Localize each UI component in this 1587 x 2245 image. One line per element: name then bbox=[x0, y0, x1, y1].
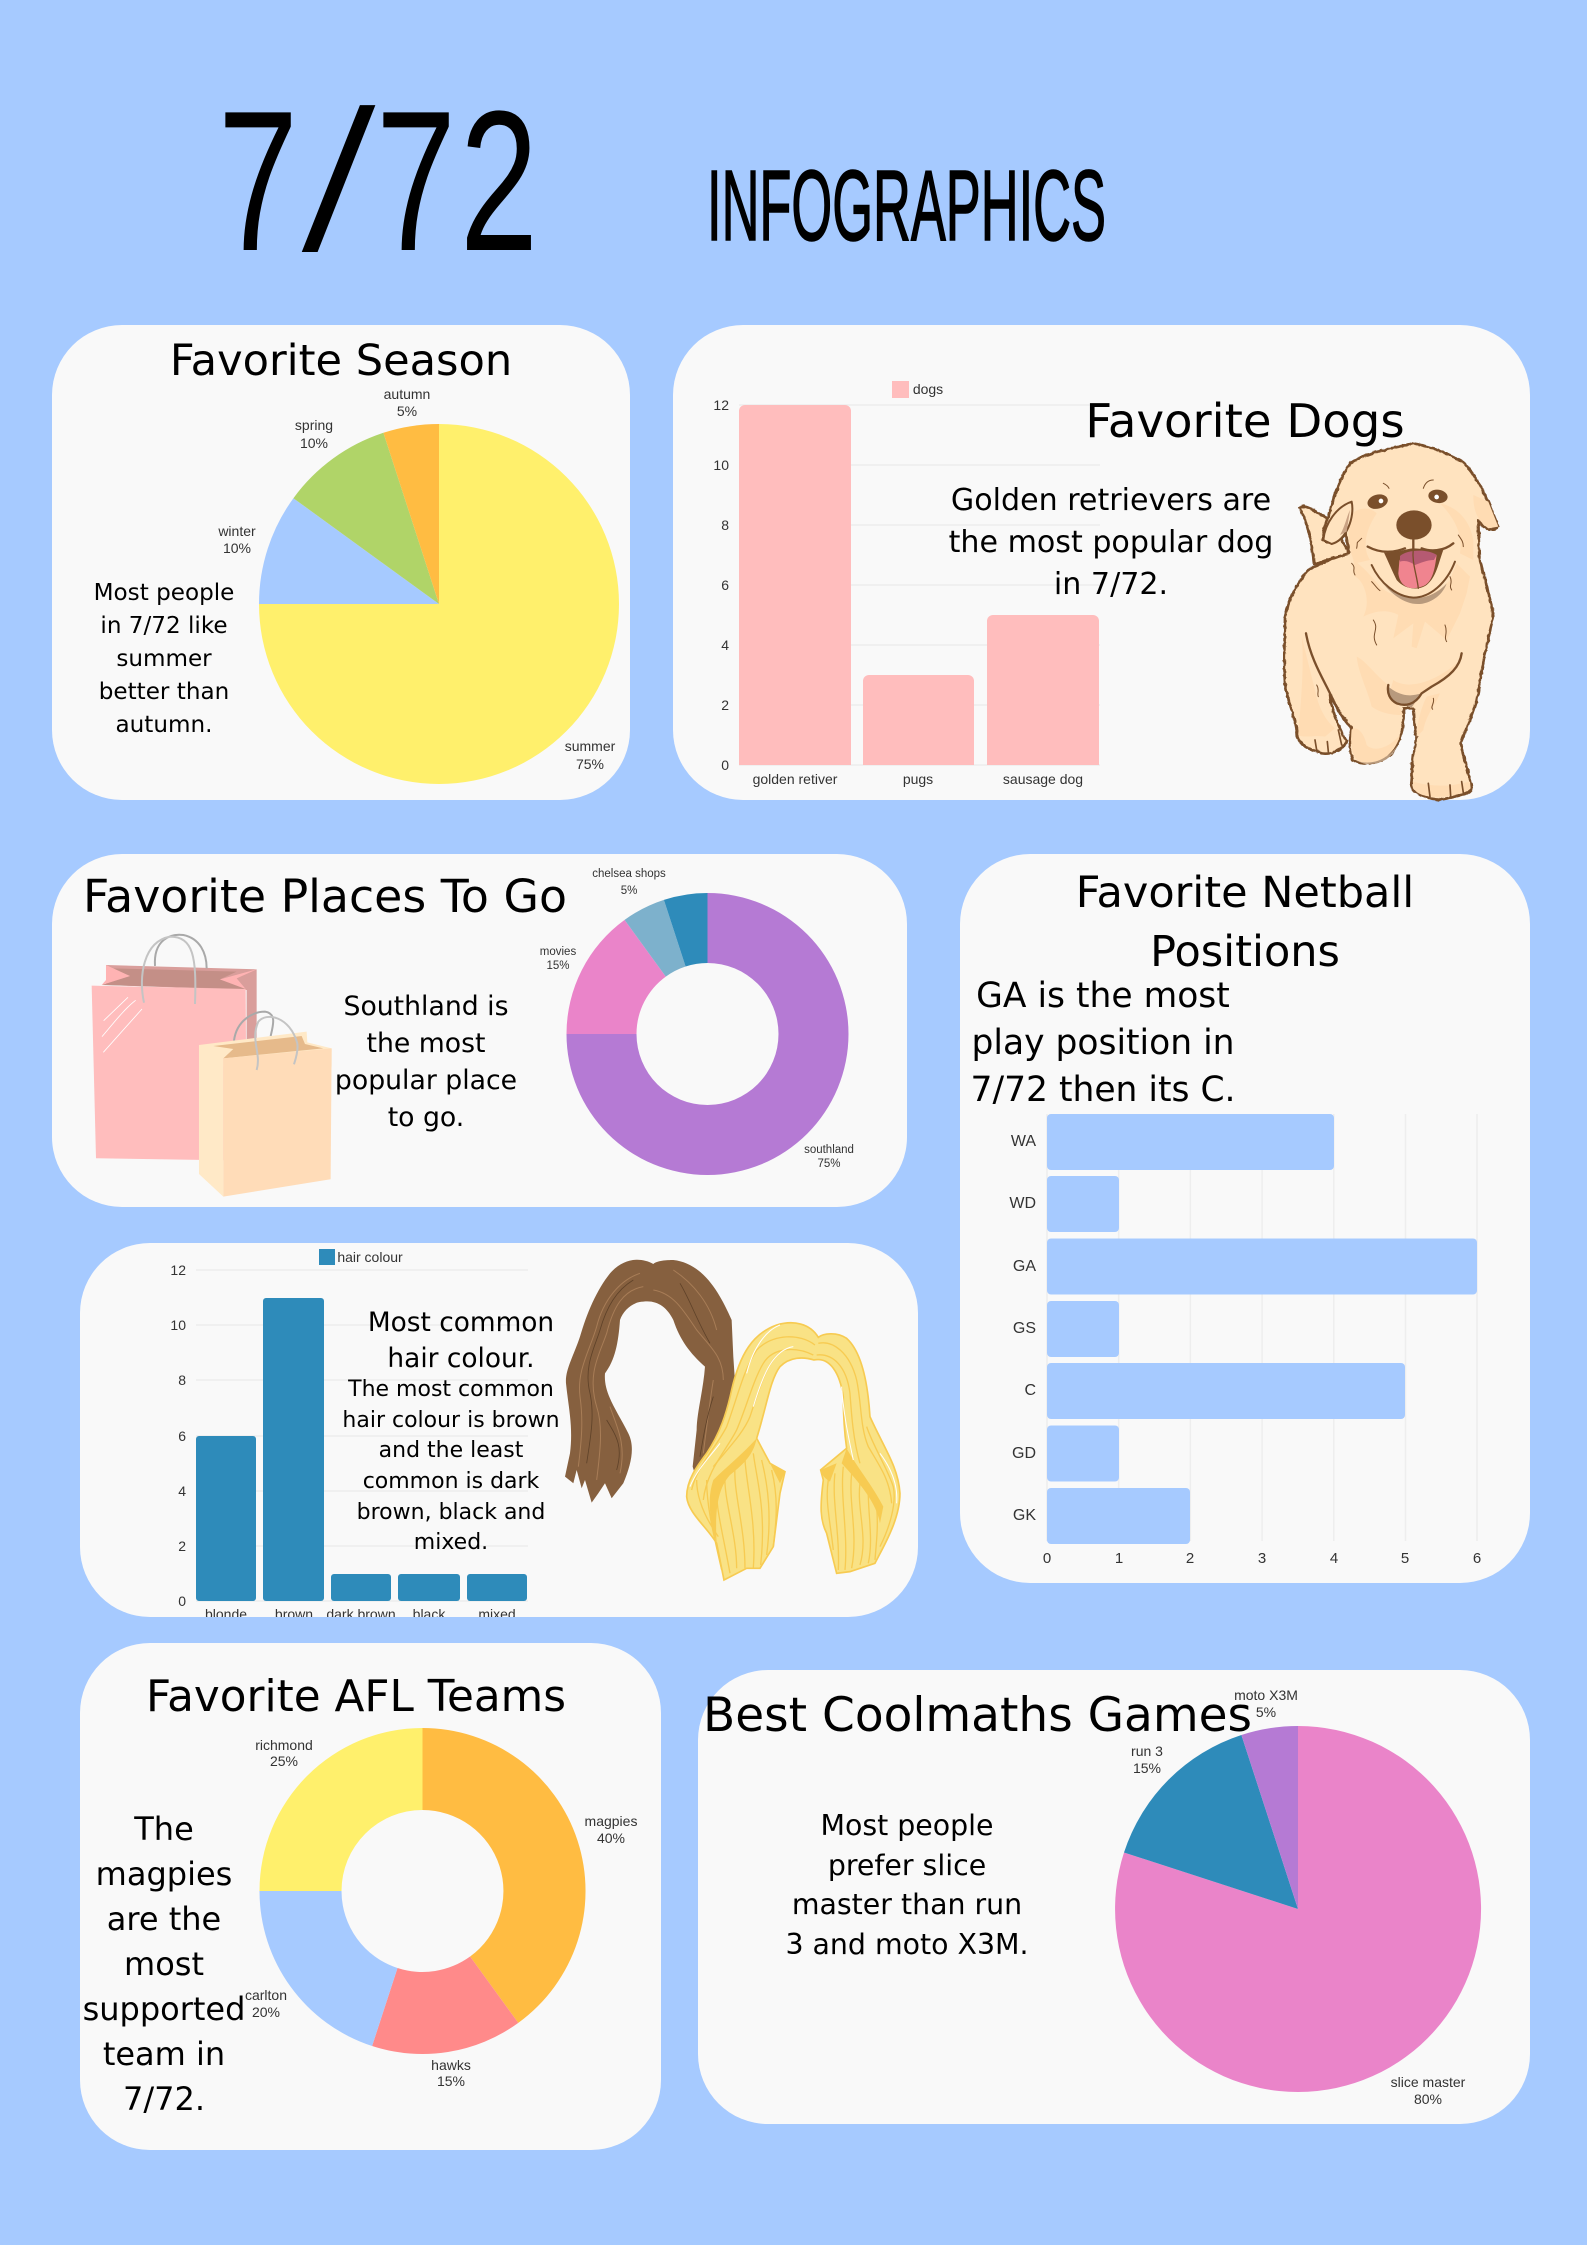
pie chart: seasons: 10% bbox=[223, 540, 251, 556]
bar chart: netball positions: GS bbox=[1013, 1320, 1036, 1337]
text: afl finding: 7/72. bbox=[123, 2080, 205, 2118]
pie chart: games: moto X3M bbox=[1234, 1687, 1298, 1703]
bar chart: hair colour: black bbox=[413, 1606, 446, 1622]
text: afl finding: supported bbox=[83, 1990, 245, 2028]
icon: golden retriever puppy bbox=[1284, 443, 1498, 800]
pie chart: seasons: 75% bbox=[576, 756, 604, 772]
text: season finding: autumn. bbox=[116, 712, 212, 738]
heading: favorite netball positions: Favorite Netball bbox=[1076, 868, 1414, 918]
pie chart: seasons: winter bbox=[217, 523, 256, 539]
heading: favorite dogs: Favorite Dogs bbox=[1085, 394, 1405, 448]
bar chart: dogs bbox=[713, 381, 1100, 787]
heading: most common hair colour: hair colour. bbox=[387, 1343, 535, 1374]
bar chart: dogs: 2 bbox=[721, 697, 729, 713]
text: netball finding: GA is the most bbox=[976, 976, 1230, 1016]
text: afl finding: team in bbox=[103, 2035, 225, 2073]
text: netball finding: play position in bbox=[971, 1023, 1235, 1063]
bar chart: dogs: dogs bbox=[913, 381, 943, 397]
title: 7/72: 7 bbox=[218, 70, 298, 293]
bar chart: dogs: golden retiver bbox=[753, 771, 838, 787]
bar chart: netball positions: 6 bbox=[1473, 1550, 1481, 1567]
text: games finding: prefer slice bbox=[828, 1849, 986, 1882]
bar chart: dogs: pugs bbox=[903, 771, 933, 787]
text: games finding: 3 and moto X3M. bbox=[785, 1928, 1029, 1961]
text: season finding: summer bbox=[116, 646, 212, 672]
donut chart: places: 5% bbox=[621, 885, 637, 897]
donut chart: places: movies bbox=[540, 946, 576, 958]
bar chart: dogs: 0 bbox=[721, 757, 729, 773]
bar chart: dogs: sausage dog bbox=[1003, 771, 1083, 787]
heading: infographics: INFOGRAPHICS bbox=[707, 150, 1106, 262]
panel: best coolmaths games bbox=[698, 1670, 1530, 2124]
pie chart: seasons bbox=[217, 386, 619, 784]
donut chart: places: chelsea shops bbox=[592, 868, 666, 880]
text: afl finding: are the bbox=[107, 1900, 221, 1938]
panel: favorite season bbox=[52, 325, 630, 800]
text: season finding: in 7/72 like bbox=[100, 613, 228, 639]
bar chart: hair colour: 8 bbox=[178, 1372, 186, 1388]
pie chart: seasons: spring bbox=[295, 417, 333, 433]
donut chart: afl teams: carlton bbox=[245, 1987, 287, 2003]
panel: favorite netball positions bbox=[960, 854, 1530, 1583]
heading: best coolmaths games: Best Coolmaths Games bbox=[703, 1688, 1252, 1743]
donut chart: afl teams bbox=[245, 1728, 637, 2089]
bar chart: dogs: 8 bbox=[721, 517, 729, 533]
bar chart: netball positions: 2 bbox=[1186, 1550, 1194, 1567]
panel: favorite places bbox=[52, 854, 907, 1207]
icon: brown and blonde wigs bbox=[565, 1260, 900, 1580]
donut chart: afl teams: 40% bbox=[597, 1830, 625, 1846]
text: hair finding: common is dark bbox=[363, 1469, 540, 1494]
bar chart: netball positions: 3 bbox=[1258, 1550, 1266, 1567]
title: 7/72: 2 bbox=[460, 70, 538, 293]
donut chart: afl teams: hawks bbox=[431, 2057, 471, 2073]
bar chart: netball positions: C bbox=[1024, 1382, 1036, 1399]
bar chart: hair colour: 4 bbox=[178, 1483, 186, 1499]
text: season finding: better than bbox=[99, 679, 229, 705]
title: 7/72: 7 bbox=[376, 70, 456, 293]
bar chart: netball positions: GA bbox=[1013, 1258, 1036, 1275]
donut chart: afl teams: 25% bbox=[270, 1753, 298, 1769]
text: places finding: popular place bbox=[335, 1065, 517, 1096]
bar chart: dogs: 12 bbox=[713, 397, 729, 413]
text: games finding: Most people bbox=[820, 1809, 994, 1842]
bar chart: netball positions: 0 bbox=[1043, 1550, 1051, 1567]
bar chart: hair colour: blonde bbox=[205, 1606, 247, 1622]
icon: shopping bags bbox=[92, 935, 332, 1197]
text: hair finding: mixed. bbox=[414, 1530, 488, 1555]
bar chart: netball positions bbox=[1009, 1114, 1481, 1567]
shading bbox=[1298, 503, 1473, 797]
bar chart: dogs: 10 bbox=[713, 457, 729, 473]
heading: most common hair colour: Most common bbox=[368, 1307, 554, 1338]
donut chart: afl teams: magpies bbox=[585, 1813, 637, 1829]
donut chart: afl teams: 20% bbox=[252, 2004, 280, 2020]
donut chart: places: 15% bbox=[546, 960, 570, 972]
bar chart: netball positions: 5 bbox=[1401, 1550, 1409, 1567]
text: dogs finding: the most popular dog bbox=[949, 525, 1273, 560]
bar chart: hair colour: 10 bbox=[170, 1317, 186, 1333]
text: places finding: to go. bbox=[388, 1102, 464, 1133]
title: 7/72: / bbox=[297, 69, 380, 293]
panel: favorite dogs bbox=[673, 325, 1530, 800]
text: season finding: Most people bbox=[94, 580, 234, 606]
donut chart: places: 75% bbox=[817, 1158, 841, 1170]
text: dogs finding: Golden retrievers are bbox=[951, 483, 1271, 518]
text: places finding: the most bbox=[367, 1028, 485, 1059]
title: 7/72 bbox=[218, 69, 538, 293]
bar chart: netball positions: WA bbox=[1011, 1133, 1036, 1150]
text: places finding: Southland is bbox=[344, 991, 508, 1022]
pie chart: games: 5% bbox=[1256, 1704, 1276, 1720]
bar chart: hair colour: hair colour bbox=[337, 1249, 403, 1265]
text: netball finding: 7/72 then its C. bbox=[970, 1070, 1236, 1110]
text: hair finding: The most common bbox=[348, 1377, 554, 1402]
pie chart: seasons: summer bbox=[565, 738, 616, 754]
heading: favorite places to go: Favorite Places To Go bbox=[83, 869, 567, 923]
text: afl finding: magpies bbox=[96, 1855, 232, 1893]
bar chart: hair colour bbox=[170, 1249, 528, 1622]
bar chart: hair colour: 2 bbox=[178, 1538, 186, 1554]
bar chart: hair colour: 0 bbox=[178, 1593, 186, 1609]
text: afl finding: The bbox=[134, 1810, 194, 1848]
pie chart: games: 80% bbox=[1414, 2091, 1442, 2107]
bar chart: hair colour: brown bbox=[275, 1606, 313, 1622]
text: afl finding: most bbox=[124, 1945, 204, 1983]
donut chart: afl teams: 15% bbox=[437, 2073, 465, 2089]
bar chart: hair colour: 6 bbox=[178, 1428, 186, 1444]
pie chart: seasons: 10% bbox=[300, 435, 328, 451]
pie chart: games: run 3 bbox=[1131, 1743, 1163, 1759]
panel: favorite afl teams bbox=[80, 1643, 661, 2150]
donut chart: places: southland bbox=[804, 1144, 854, 1156]
bar chart: netball positions: 4 bbox=[1330, 1550, 1338, 1567]
pie chart: games bbox=[1115, 1687, 1481, 2107]
pie chart: games: slice master bbox=[1391, 2074, 1466, 2090]
heading: favorite afl teams: Favorite AFL Teams bbox=[146, 1671, 566, 1722]
bar chart: hair colour: dark brown bbox=[326, 1606, 396, 1622]
bar chart: hair colour: 12 bbox=[170, 1262, 186, 1278]
text: hair finding: and the least bbox=[379, 1438, 524, 1463]
text: dogs finding: in 7/72. bbox=[1054, 567, 1168, 602]
donut chart: afl teams: richmond bbox=[255, 1737, 313, 1753]
heading: favorite season: Favorite Season bbox=[170, 336, 512, 386]
text: hair finding: brown, black and bbox=[357, 1500, 545, 1525]
bar chart: dogs: 6 bbox=[721, 577, 729, 593]
text: games finding: master than run bbox=[792, 1888, 1022, 1921]
pie chart: seasons: autumn bbox=[384, 386, 430, 402]
mouth bbox=[1380, 580, 1447, 604]
text: hair finding: hair colour is brown bbox=[342, 1408, 560, 1433]
bar chart: netball positions: 1 bbox=[1115, 1550, 1123, 1567]
bar chart: netball positions: GD bbox=[1012, 1445, 1036, 1462]
bar chart: netball positions: GK bbox=[1013, 1507, 1036, 1524]
donut chart: places bbox=[540, 868, 854, 1175]
panel: hair colour bbox=[80, 1243, 918, 1622]
bar chart: dogs: 4 bbox=[721, 637, 729, 653]
pie chart: seasons: 5% bbox=[397, 403, 417, 419]
heading: favorite netball positions: Positions bbox=[1150, 927, 1340, 977]
bar chart: hair colour: mixed bbox=[478, 1606, 516, 1622]
pie chart: games: 15% bbox=[1133, 1760, 1161, 1776]
bar chart: netball positions: WD bbox=[1009, 1195, 1036, 1212]
